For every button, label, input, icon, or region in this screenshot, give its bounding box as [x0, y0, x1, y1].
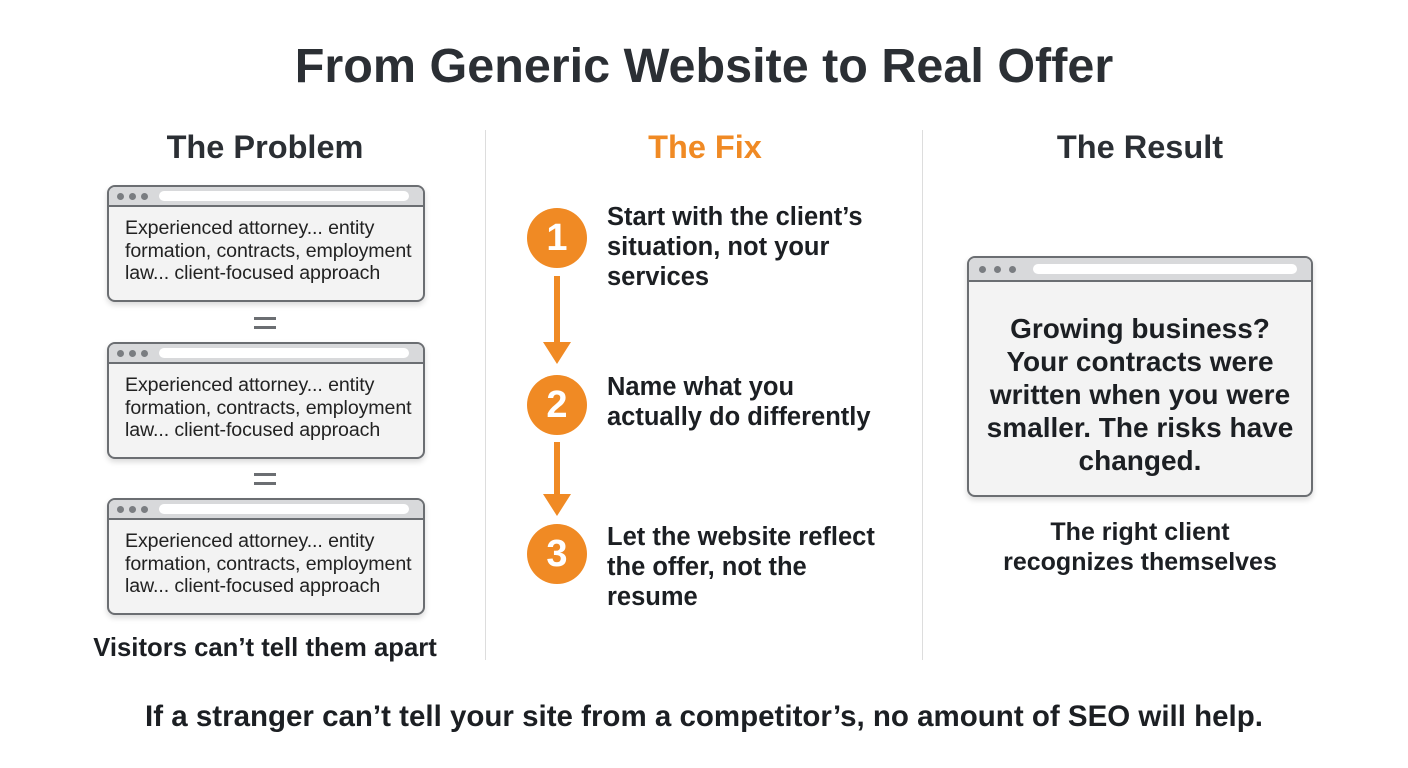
step 3: Let the website reflect	[607, 523, 875, 551]
window 3: law... client-focused approach	[125, 575, 380, 597]
window 2	[107, 342, 425, 459]
caption: Visitors can’t tell them apart	[93, 634, 437, 662]
window 3: formation, contracts, employment	[125, 552, 411, 574]
result window	[967, 256, 1313, 497]
step 1: Start with the client’s	[607, 203, 863, 231]
window 1: Experienced attorney... entity	[125, 217, 374, 239]
heading: The Problem: The Problem	[167, 129, 363, 165]
window 2: law... client-focused approach	[125, 419, 380, 441]
panel: result	[965, 129, 1315, 576]
window 1: law... client-focused approach	[125, 262, 380, 284]
step 1	[527, 203, 863, 291]
icon: number 2: 2	[546, 384, 568, 426]
icon: number 1: 1	[546, 217, 568, 259]
caption: recognizes themselves	[1003, 548, 1277, 576]
heading: The Fix: The Fix	[648, 129, 762, 165]
heading: The Result: The Result	[1057, 129, 1223, 165]
step 3: the offer, not the	[607, 553, 807, 581]
step 2	[527, 373, 871, 435]
window 2: formation, contracts, employment	[125, 396, 411, 418]
result window: smaller. The risks have	[987, 412, 1293, 443]
caption: The right client	[1050, 518, 1230, 546]
step 2: actually do differently	[607, 403, 871, 431]
result window: changed.	[1079, 445, 1201, 476]
arrow 2	[543, 442, 571, 516]
step 1: services	[607, 263, 709, 291]
step 3	[527, 523, 875, 611]
panel: problem	[93, 129, 437, 662]
bottom takeaway: If a stranger can’t tell your site from a competitor’s, no amount of SEO will help.	[145, 700, 1263, 733]
window 3: Experienced attorney... entity	[125, 530, 374, 552]
window 1: formation, contracts, employment	[125, 240, 411, 262]
result window: written when you were	[990, 379, 1290, 410]
step 1: situation, not your	[607, 233, 829, 261]
arrow 1	[543, 276, 571, 364]
window 3	[107, 498, 425, 615]
icon: number 1	[527, 208, 587, 268]
caption	[1003, 518, 1277, 576]
step 3: resume	[607, 583, 698, 611]
icon: number 3: 3	[546, 533, 568, 575]
window 2: Experienced attorney... entity	[125, 374, 374, 396]
title: From Generic Website to Real Offer	[295, 39, 1113, 93]
result window: Growing business?	[1010, 313, 1270, 344]
window 1	[107, 185, 425, 302]
result window: Your contracts were	[1006, 346, 1274, 377]
icon: number 3	[527, 524, 587, 584]
step 2: Name what you	[607, 373, 794, 401]
icon: number 2	[527, 375, 587, 435]
